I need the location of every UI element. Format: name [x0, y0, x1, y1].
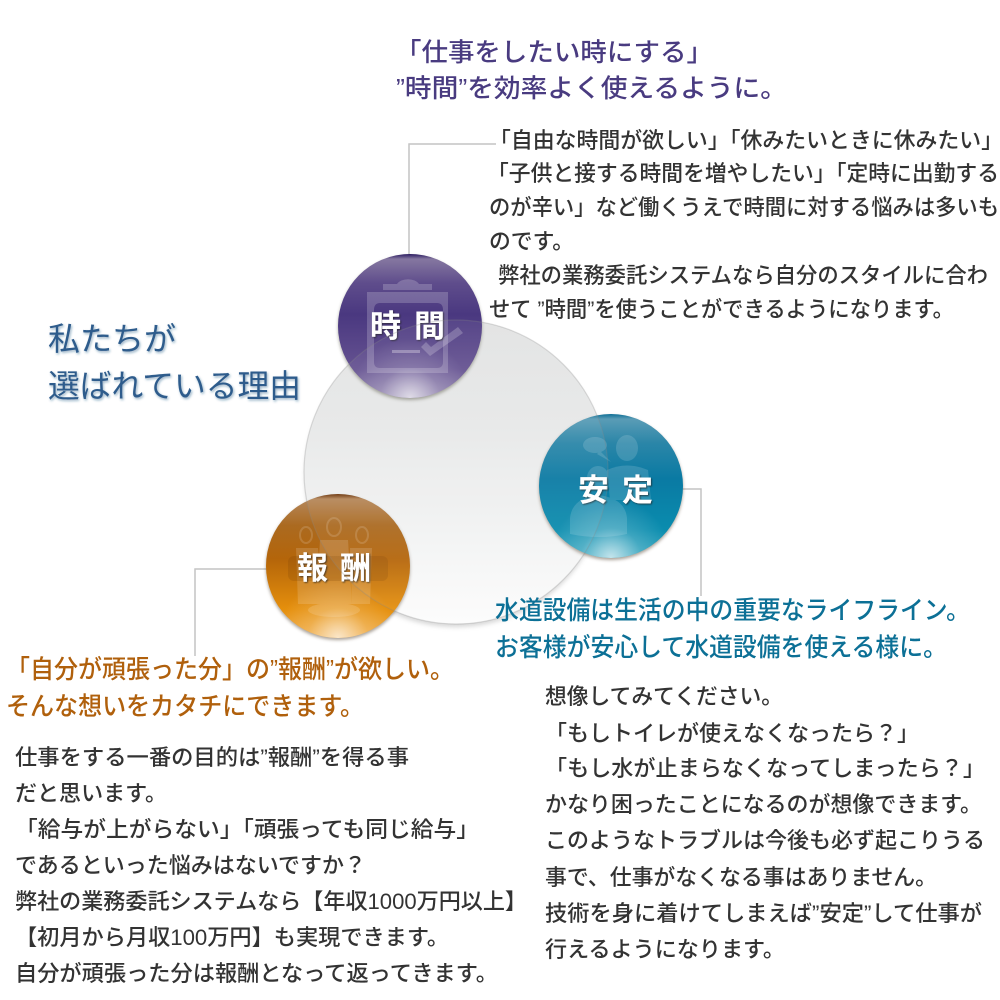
text block: reward: 自分が頑張った分は報酬となって返ってきます。: [15, 961, 498, 986]
heading: time: [395, 39, 787, 103]
heading: stability: 水道設備は生活の中の重要なライフライン。: [495, 597, 970, 625]
label: 時間: [370, 309, 445, 344]
text block: reward: であるといった悩みはないですか？: [15, 853, 366, 878]
connector: stability: [668, 489, 701, 596]
text block: stability: [545, 684, 985, 962]
icon: group of people: [296, 518, 372, 617]
text block: time: せて ”時間”を使うことができるようになります。: [489, 297, 954, 322]
text block: time: 弊社の業務委託システムなら自分のスタイルに合わ: [498, 263, 988, 288]
disc edge over spheres: [304, 320, 608, 624]
text block: reward: [15, 745, 527, 986]
label: 報酬: [297, 551, 371, 586]
icon: people with speech bubble: [570, 435, 651, 537]
text block: time: [487, 128, 1000, 322]
connector: time: [409, 144, 496, 270]
text block: reward: 【初月から月収100万円】も実現できます。: [15, 925, 449, 950]
text block: stability: かなり困ったことになるのが想像できます。: [545, 792, 982, 817]
text block: stability: 事で、仕事がなくなる事はありません。: [545, 865, 937, 890]
sphere: reward: [266, 494, 410, 640]
text block: time: のです。: [489, 229, 574, 254]
text block: time: 「自由な時間が欲しい」「休みたいときに休みたい」: [489, 128, 1000, 153]
heading: reward: [6, 656, 454, 721]
heading: why we are chosen: [48, 321, 301, 404]
text block: stability: このようなトラブルは今後も必ず起こりうる: [545, 828, 985, 853]
heading: time: 「仕事をしたい時にする」: [395, 39, 713, 67]
heading: stability: [495, 597, 970, 662]
text block: reward: だと思います。: [15, 781, 167, 806]
text block: stability: 想像してみてください。: [545, 684, 783, 709]
text block: reward: 「給与が上がらない」「頑張っても同じ給与」: [15, 817, 479, 842]
text block: reward: 弊社の業務委託システムなら【年収1000万円以上】: [15, 889, 527, 914]
sphere: stability: [539, 414, 683, 560]
heading: why we are chosen: 選ばれている理由: [48, 368, 301, 404]
heading: stability: お客様が安心して水道設備を使える様に。: [495, 634, 947, 662]
text block: stability: 「もし水が止まらなくなってしまったら？」: [545, 756, 985, 781]
heading: reward: 「自分が頑張った分」の”報酬”が欲しい。: [6, 656, 454, 684]
sphere: time: [338, 254, 482, 400]
text block: stability: 「もしトイレが使えなくなったら？」: [545, 721, 919, 746]
label: 安定: [578, 473, 653, 508]
text block: stability: 技術を身に着けてしまえば”安定”して仕事が: [545, 901, 982, 926]
text block: reward: 仕事をする一番の目的は”報酬”を得る事: [15, 745, 409, 770]
icon: clipboard with check: [367, 279, 463, 373]
panel: central glass disc: [304, 320, 608, 627]
connector: reward: [195, 569, 281, 656]
text block: time: 「子供と接する時間を増やしたい」「定時に出勤する: [487, 161, 999, 186]
text block: stability: 行えるようになります。: [545, 937, 785, 962]
heading: reward: そんな想いをカタチにできます。: [6, 693, 364, 721]
heading: why we are chosen: 私たちが: [48, 321, 176, 357]
heading: time: ”時間”を効率よく使えるように。: [396, 75, 787, 103]
